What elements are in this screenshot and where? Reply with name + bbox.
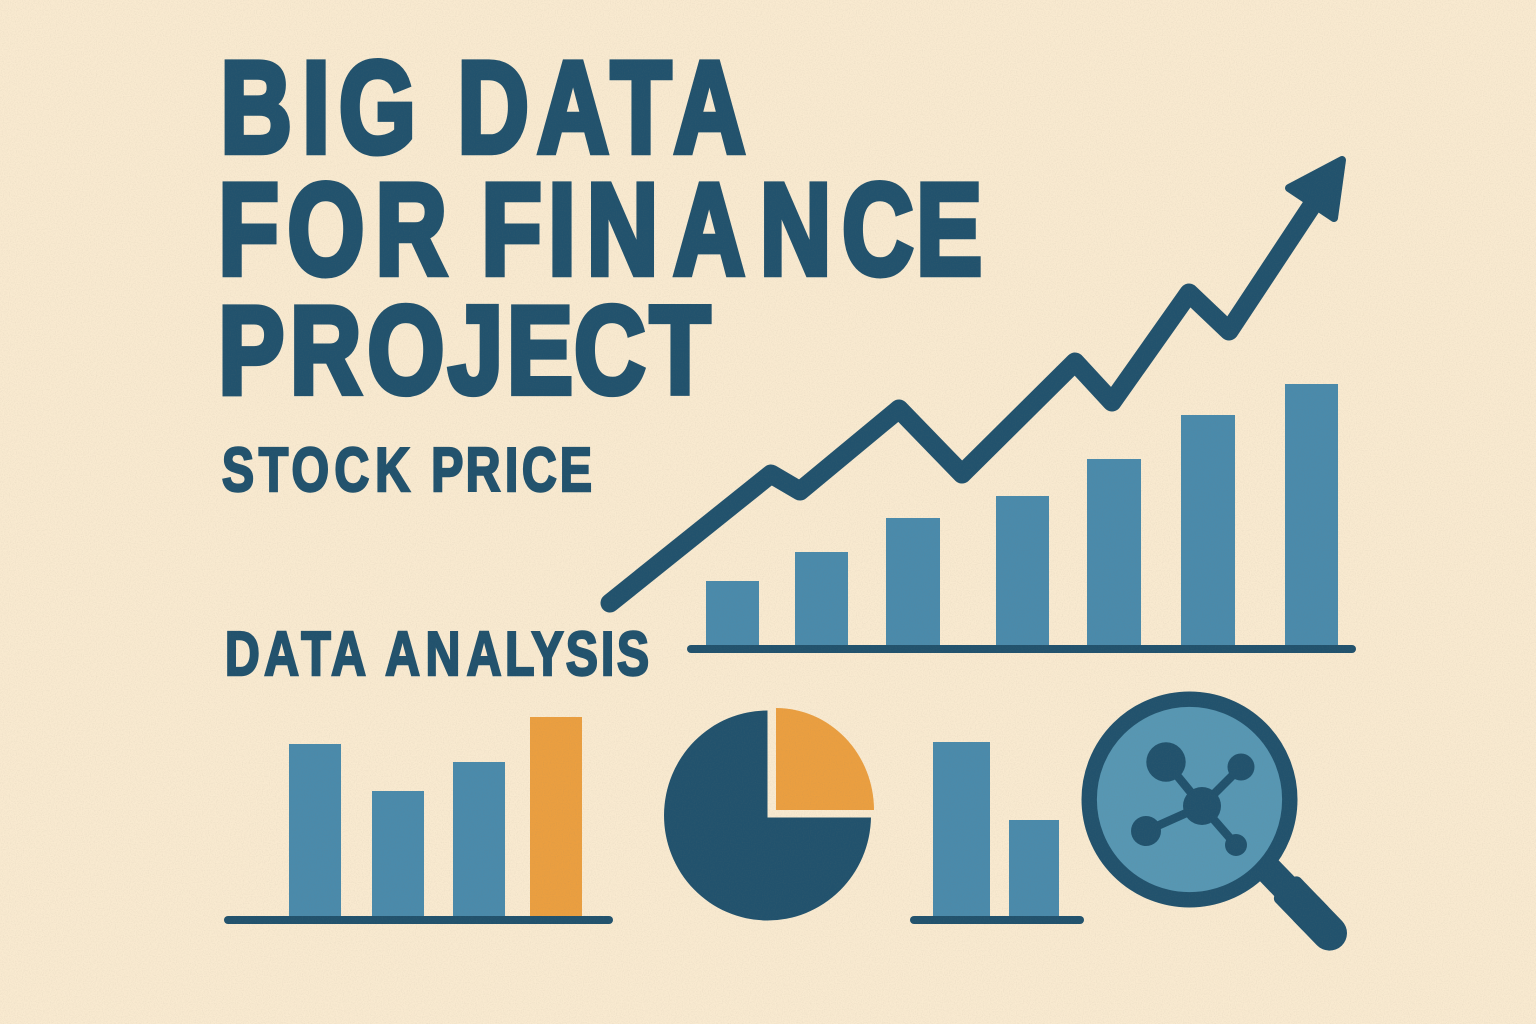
bar chart: data analysis right bbox=[910, 742, 1084, 924]
subtitle: stock price: STOCK PRICE bbox=[222, 435, 592, 504]
title: BIG DATA bbox=[220, 35, 745, 180]
subtitle: data analysis: DATA ANALYSIS bbox=[225, 619, 649, 688]
title bbox=[218, 35, 982, 420]
icon: magnifying glass with network bbox=[1089, 699, 1354, 958]
pie chart bbox=[664, 708, 874, 920]
title: FOR FINANCE bbox=[218, 157, 982, 302]
bar chart: data analysis left bbox=[224, 717, 613, 924]
title: PROJECT bbox=[218, 280, 710, 420]
bar chart: stock price bbox=[687, 384, 1356, 653]
line chart arrow bbox=[610, 160, 1342, 603]
